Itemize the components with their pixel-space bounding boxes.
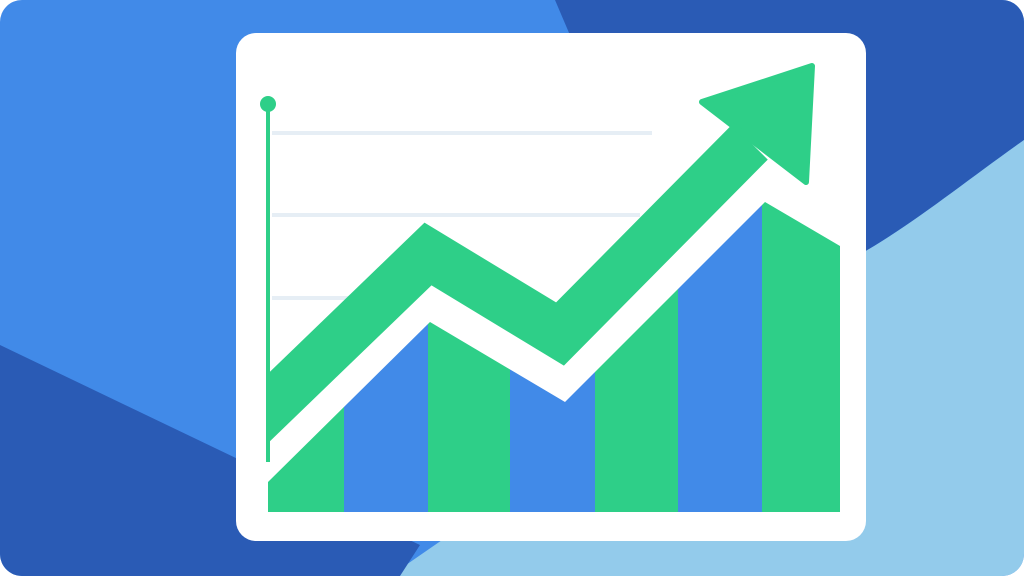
axis	[260, 96, 276, 462]
background: dark band top-right	[555, 0, 1024, 250]
background: light blue bottom-right	[390, 140, 1024, 576]
card	[236, 33, 866, 541]
bar chart	[268, 202, 840, 512]
gridlines	[272, 133, 652, 298]
arrow: rising trend	[230, 66, 812, 445]
background: dark band bottom-left	[0, 345, 420, 576]
